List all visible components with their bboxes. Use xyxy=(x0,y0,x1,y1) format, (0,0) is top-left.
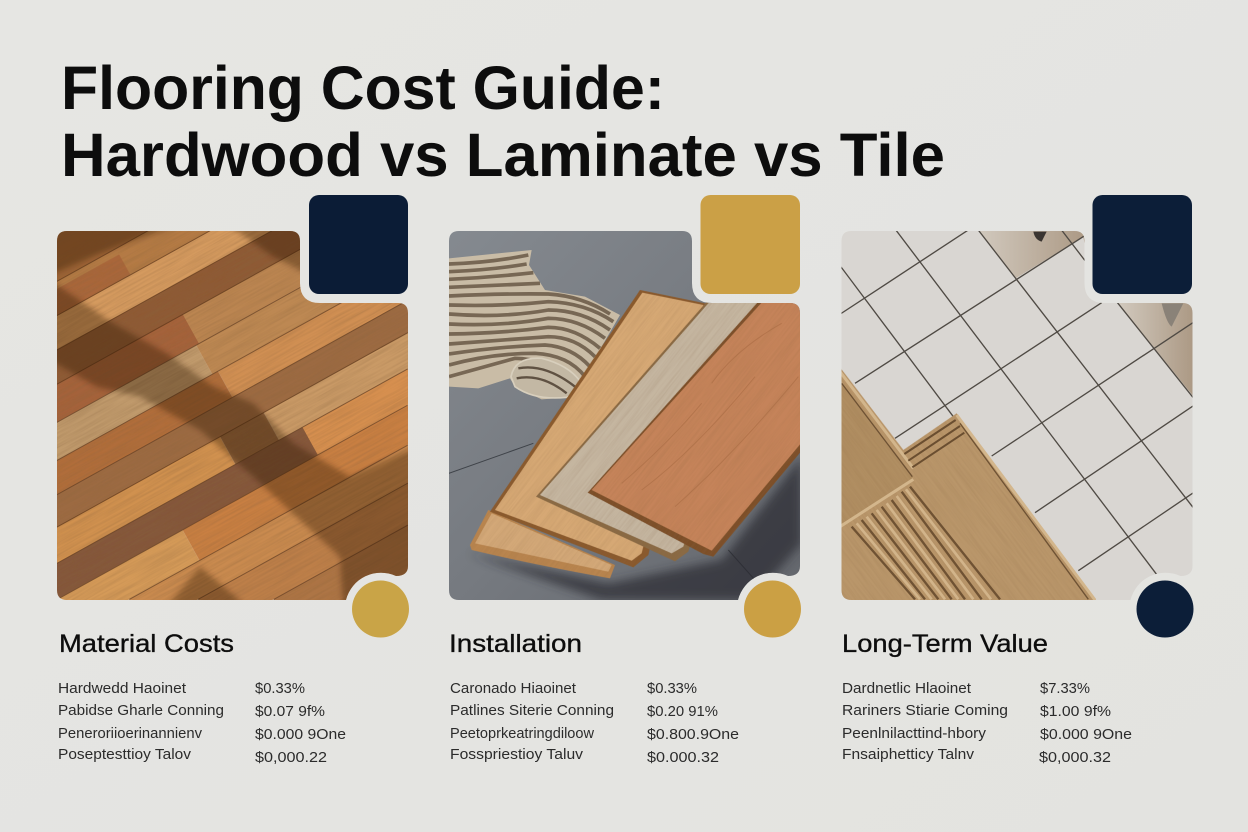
table: installation rows: $0.000.32 xyxy=(647,750,719,766)
table: long-term value rows: Fnsaiphetticy Talnv xyxy=(842,747,975,763)
table: installation rows: Caronado Hiaoinet xyxy=(450,681,576,697)
table: material costs rows: $0.000 9One xyxy=(255,727,346,743)
swatch: gold circle xyxy=(352,580,409,638)
table: material costs rows: Hardwedd Haoinet xyxy=(58,681,186,697)
swatch: gold circle xyxy=(744,580,801,638)
table: material costs rows: $0.07 9f% xyxy=(255,704,325,720)
title xyxy=(61,54,945,189)
ripple underlay xyxy=(449,250,620,399)
table: material costs rows: $0.33% xyxy=(255,681,305,697)
table: installation rows: Patlines Siterie Conning xyxy=(450,703,614,719)
heading: installation: Installation xyxy=(449,630,582,658)
table: long-term value rows: $0,000.32 xyxy=(1039,750,1111,766)
title: Flooring Cost Guide: xyxy=(61,54,665,122)
image: tile and wood xyxy=(842,231,1192,600)
table: material costs rows: Poseptesttioy Talov xyxy=(58,747,192,763)
column: installation xyxy=(449,630,739,766)
swatch: navy circle xyxy=(1136,580,1194,638)
table: material costs rows: $0,000.22 xyxy=(255,750,327,766)
table: material costs rows: Peneroriioerinannienv xyxy=(58,726,203,742)
column: material costs xyxy=(58,630,346,766)
swatch: navy square xyxy=(1092,195,1192,294)
heading: long-term value: Long-Term Value xyxy=(842,630,1048,658)
panel: laminate xyxy=(449,195,801,638)
table: long-term value rows: $1.00 9f% xyxy=(1040,704,1111,720)
table: installation rows: $0.33% xyxy=(647,681,697,697)
table: installation rows: Fosspriestioy Taluv xyxy=(450,747,584,763)
wood flooring xyxy=(842,369,1096,600)
title: Hardwood vs Laminate vs Tile xyxy=(61,121,945,189)
table: long-term value rows: $0.000 9One xyxy=(1040,727,1132,743)
swatch: gold square xyxy=(700,195,800,294)
table: material costs rows xyxy=(58,681,346,766)
table: installation rows: $0.20 91% xyxy=(647,704,718,720)
table: long-term value rows: Rariners Stiarie Coming xyxy=(842,703,1008,719)
shadows xyxy=(50,223,417,607)
table: long-term value rows: Dardnetlic Hlaoinet xyxy=(842,681,971,697)
laminate plank stack xyxy=(470,290,800,578)
panel: hardwood xyxy=(57,195,409,638)
table: long-term value rows xyxy=(842,681,1132,766)
table: installation rows: Peetoprkeatringdiloow xyxy=(450,726,595,742)
table: long-term value rows: $7.33% xyxy=(1040,681,1090,697)
swatch: navy square xyxy=(309,195,408,294)
image: laminate planks xyxy=(449,231,800,600)
image: hardwood floor xyxy=(57,231,408,600)
table: installation rows xyxy=(450,681,739,766)
table: material costs rows: Pabidse Gharle Conning xyxy=(58,703,224,719)
table: installation rows: $0.800.9One xyxy=(647,727,739,743)
column: long-term value xyxy=(842,630,1132,766)
heading: material costs: Material Costs xyxy=(59,630,234,658)
panel: tile xyxy=(842,195,1194,638)
table: long-term value rows: Peenlnilacttind-hbory xyxy=(842,726,987,742)
